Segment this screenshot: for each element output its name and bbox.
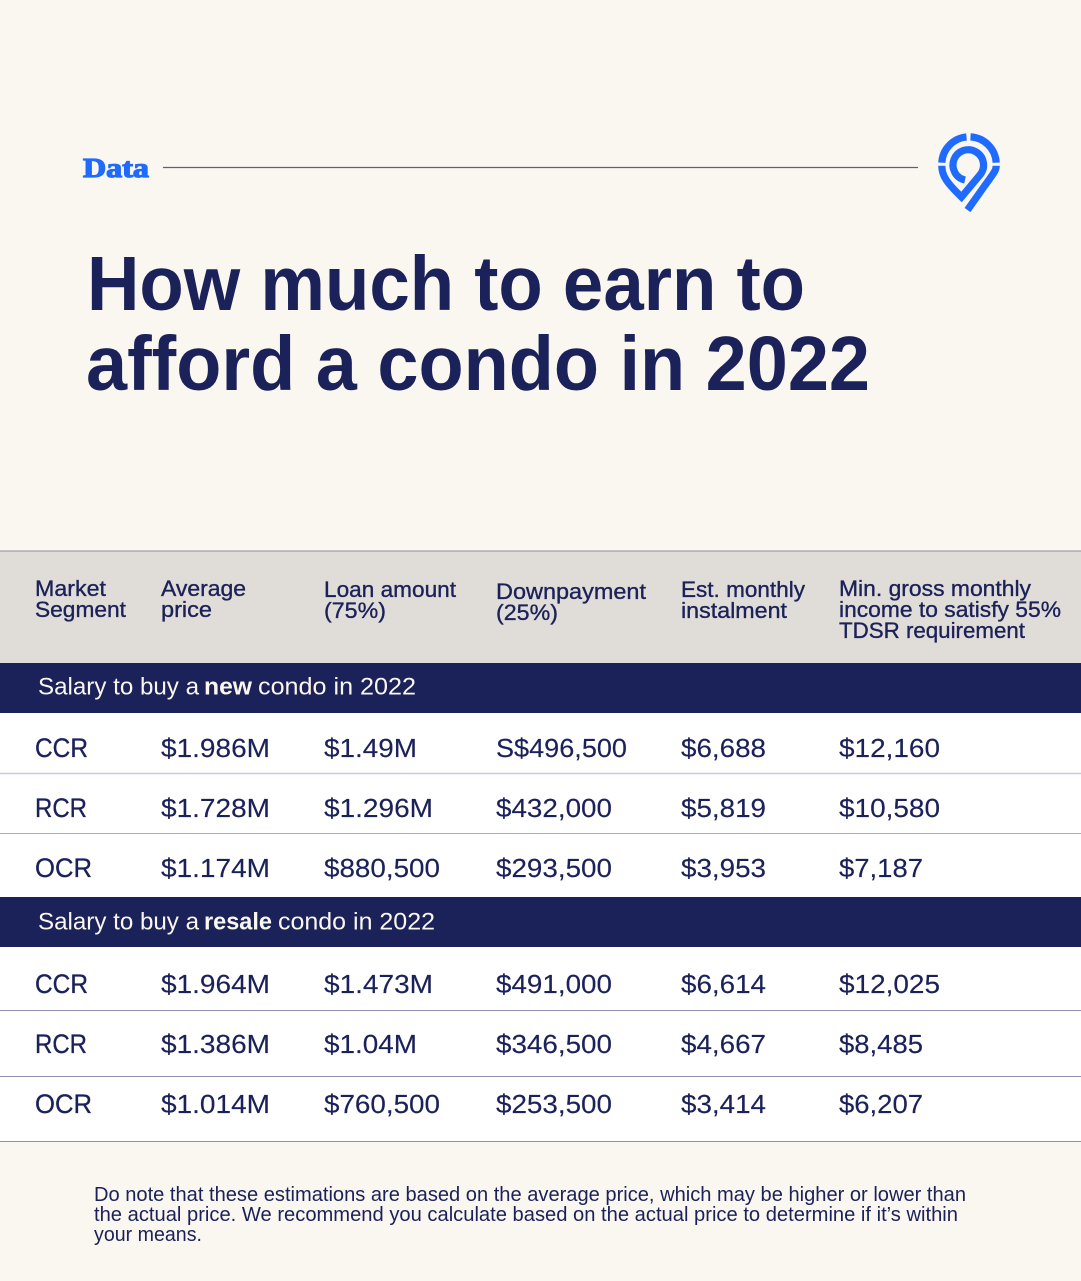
table header row: price (161, 597, 212, 622)
row: new CCR: $1.986M (161, 733, 270, 763)
row: resale OCR: $253,500 (496, 1089, 612, 1119)
row: resale RCR: $1.386M (161, 1029, 270, 1059)
row: new RCR: $10,580 (839, 793, 940, 823)
row: new CCR: CCR (35, 733, 88, 763)
table header row: (25%) (496, 600, 558, 625)
row: resale OCR: $6,207 (839, 1089, 923, 1119)
footnote: the actual price. We recommend you calculate based on the actual price to determine if it’s within (94, 1203, 958, 1226)
row: new RCR: $1.296M (324, 793, 433, 823)
table header row: Loan amount (324, 577, 457, 602)
row: new CCR: $6,688 (681, 733, 766, 763)
title: afford a condo in 2022 (86, 321, 870, 407)
row: new OCR (35, 853, 923, 883)
section band: new condo: new (204, 674, 252, 700)
row: new OCR: OCR (35, 853, 92, 883)
table header row: Market (35, 576, 107, 601)
icon: location pin logo (942, 137, 996, 210)
row: resale RCR: $346,500 (496, 1029, 612, 1059)
row: new CCR (35, 733, 940, 763)
table header row: TDSR requirement (839, 618, 1026, 643)
row: resale CCR: CCR (35, 969, 88, 999)
row: new RCR (35, 793, 940, 823)
section band: resale condo: Salary to buy a (38, 908, 200, 936)
row: new OCR: $7,187 (839, 853, 923, 883)
table header row: Min. gross monthly (839, 576, 1032, 601)
panel: data table (0, 551, 1081, 1142)
table header row: Est. monthly (681, 577, 806, 602)
row: new RCR: $5,819 (681, 793, 766, 823)
row: resale CCR: $1.473M (324, 969, 433, 999)
section band: resale condo (0, 897, 1081, 947)
row: new OCR: $293,500 (496, 853, 612, 883)
table header row (0, 551, 1081, 663)
title: How much to earn to (87, 241, 805, 327)
row: resale RCR: $8,485 (839, 1029, 923, 1059)
row: resale CCR: $12,025 (839, 969, 940, 999)
section band: resale condo: condo in 2022 (278, 908, 435, 936)
row: new CCR: $1.49M (324, 733, 417, 763)
title (86, 241, 870, 407)
section band: new condo: Salary to buy a (38, 674, 200, 700)
row: resale CCR: $6,614 (681, 969, 766, 999)
row: new CCR: $12,160 (839, 733, 940, 763)
row: new OCR: $3,953 (681, 853, 766, 883)
table header row: Average (161, 576, 246, 601)
footnote: your means. (94, 1223, 202, 1246)
row: new RCR: RCR (35, 793, 87, 823)
table header row: (75%) (324, 598, 386, 623)
row: resale CCR: $491,000 (496, 969, 612, 999)
row: new RCR: $432,000 (496, 793, 612, 823)
row: resale RCR: $1.04M (324, 1029, 417, 1059)
table header row: Segment (35, 597, 127, 622)
table header row: Downpayment (496, 579, 647, 604)
row: new CCR: S$496,500 (496, 733, 627, 763)
footnote (94, 1183, 966, 1246)
footnote: Do note that these estimations are based on the average price, which may be higher or lower than (94, 1183, 966, 1206)
row: resale OCR: OCR (35, 1089, 92, 1119)
table header row: instalment (681, 598, 788, 623)
row: new OCR: $880,500 (324, 853, 440, 883)
row: resale CCR (35, 969, 940, 999)
row: resale RCR: $4,667 (681, 1029, 766, 1059)
row: resale OCR: $760,500 (324, 1089, 440, 1119)
row: resale RCR (35, 1029, 923, 1059)
row: resale OCR: $1.014M (161, 1089, 270, 1119)
kicker: Data label: Data (83, 153, 150, 183)
section band: new condo (0, 663, 1081, 713)
table header row: income to satisfy 55% (839, 597, 1061, 622)
row: new RCR: $1.728M (161, 793, 270, 823)
section band: new condo: condo in 2022 (258, 674, 416, 700)
row: resale OCR (35, 1089, 923, 1119)
row: new OCR: $1.174M (161, 853, 270, 883)
row: resale CCR: $1.964M (161, 969, 270, 999)
row: resale OCR: $3,414 (681, 1089, 766, 1119)
row: resale RCR: RCR (35, 1029, 87, 1059)
section band: resale condo: resale (204, 908, 272, 936)
